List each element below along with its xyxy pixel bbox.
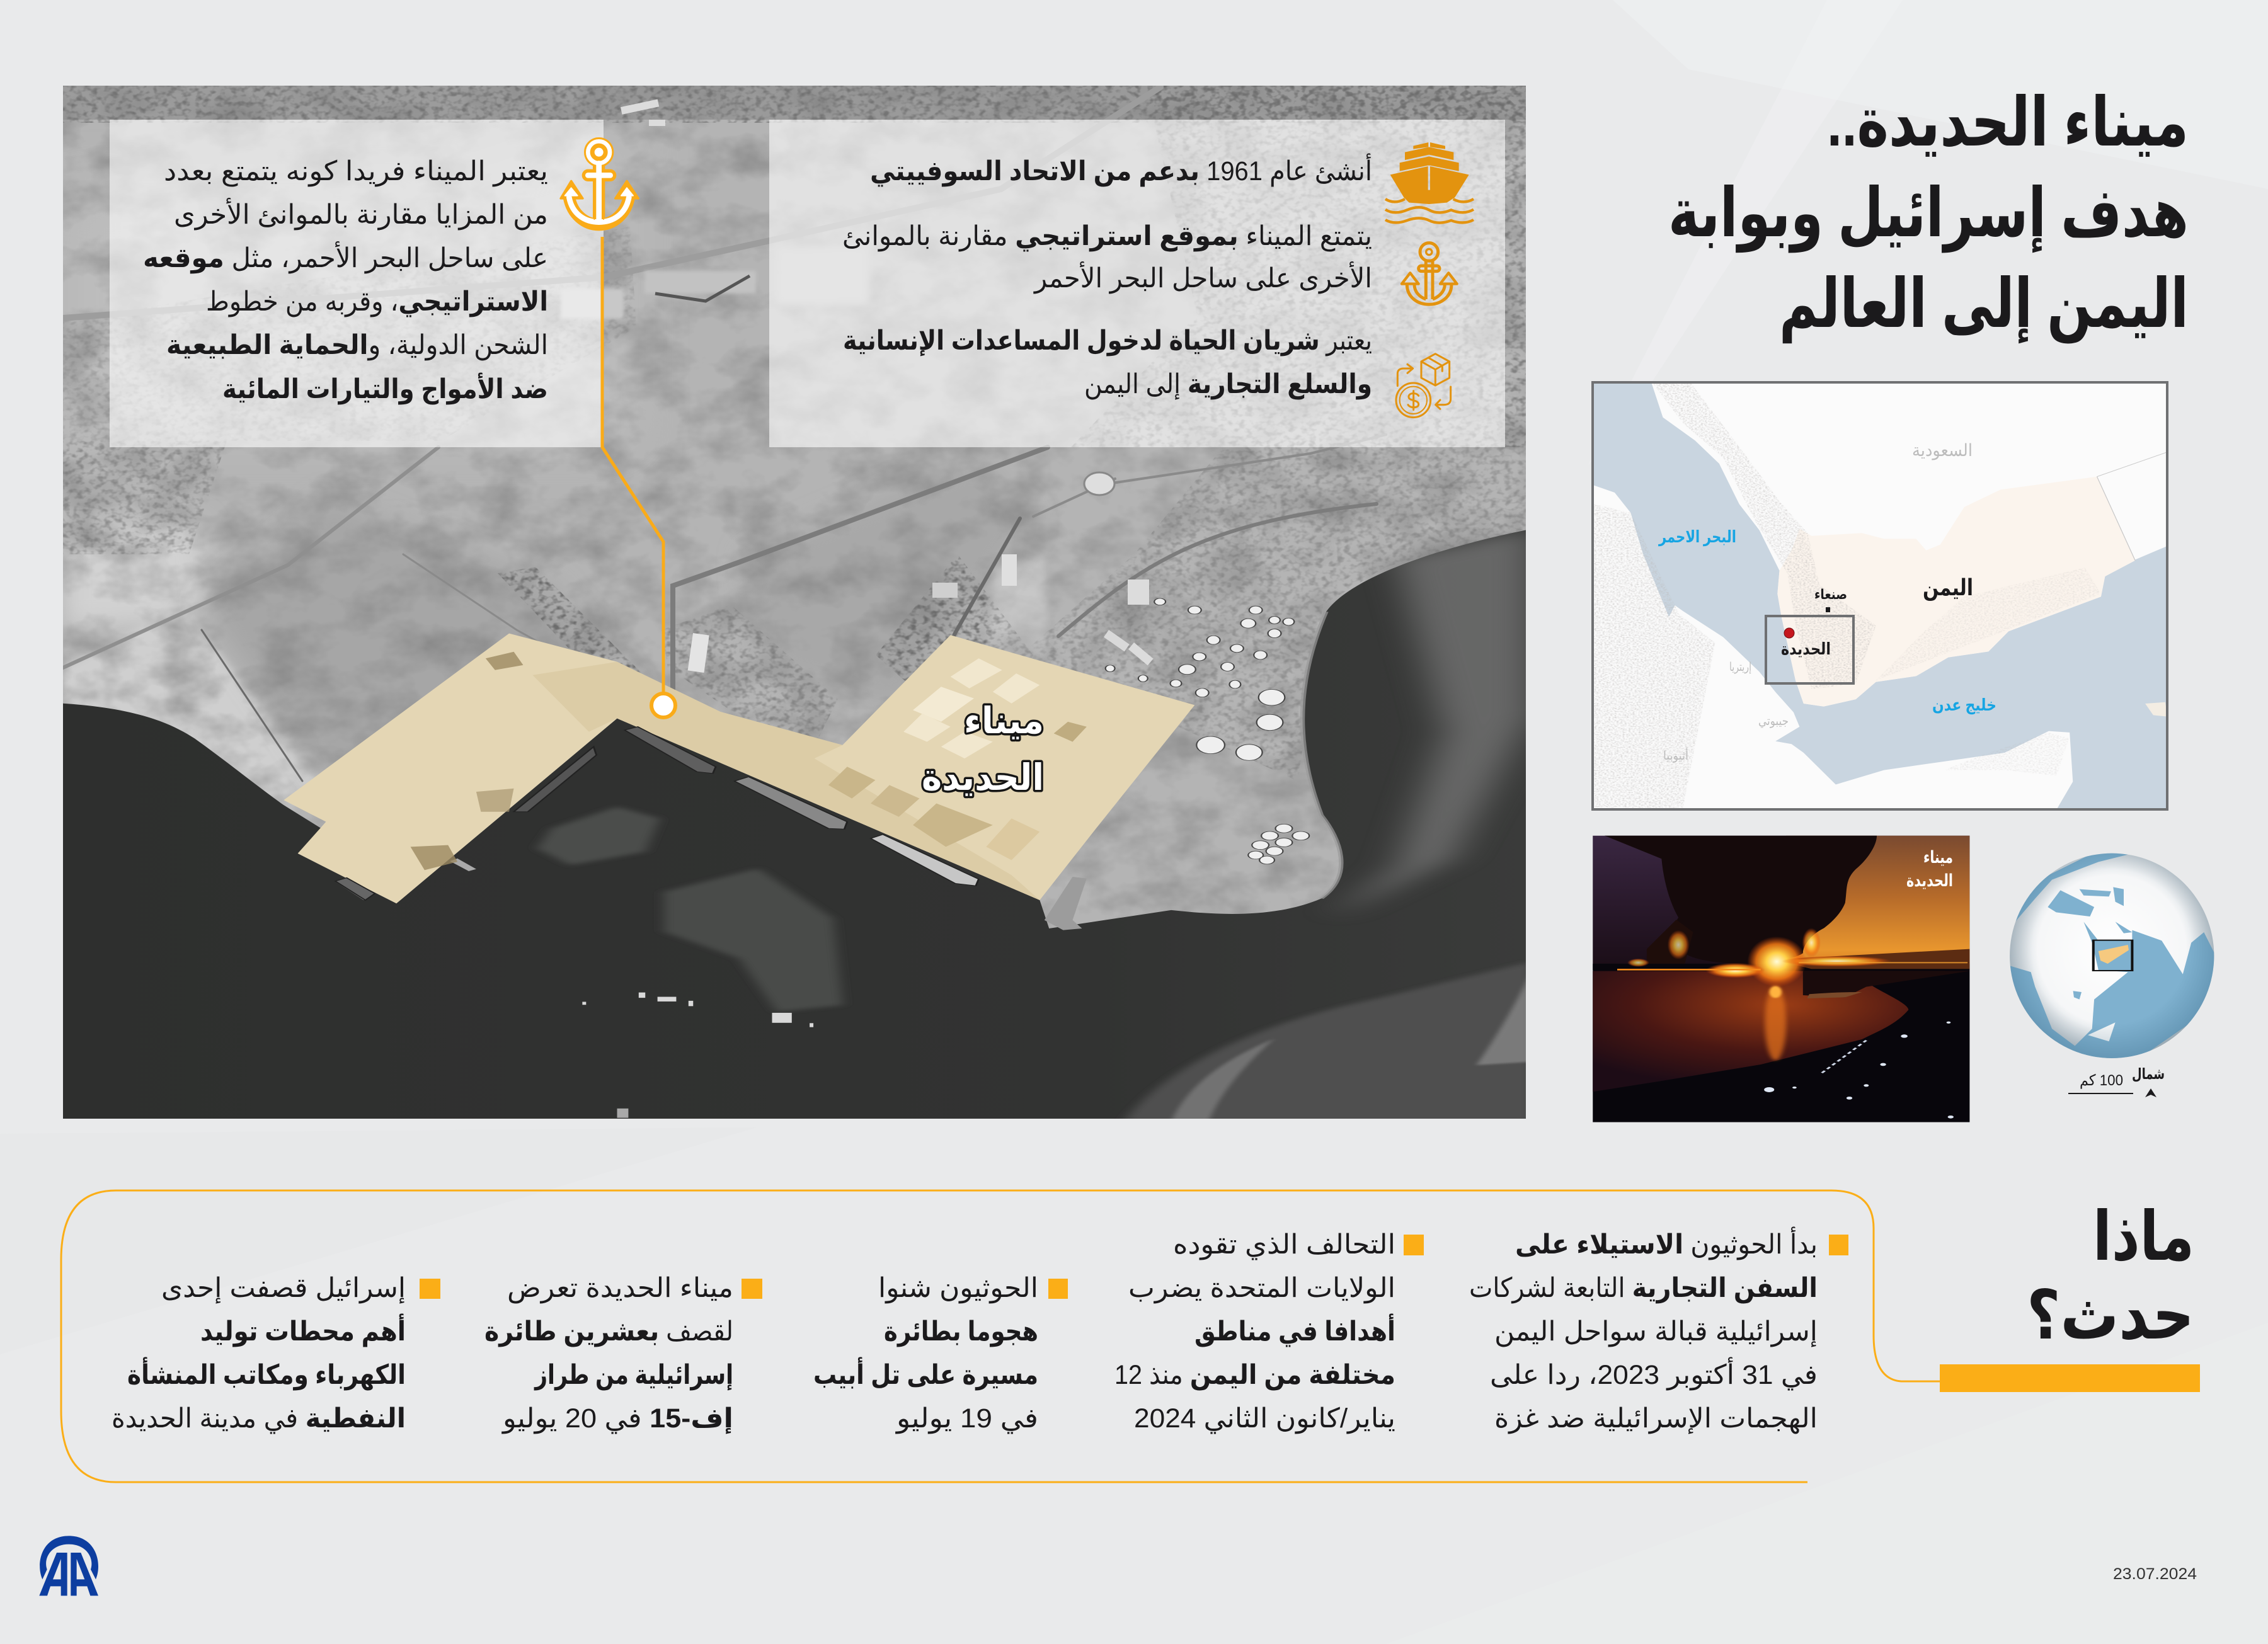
event 2	[1114, 1230, 1424, 1434]
event 4: إف-15 في 20 يوليو	[501, 1403, 733, 1434]
event 1: بدأ الحوثيون الاستيلاء على	[1515, 1226, 1818, 1260]
event 5: الكهرباء ومكاتب المنشأة	[127, 1357, 406, 1391]
map labels: صنعاء	[1814, 586, 1847, 602]
text: port facts: أنشئ عام 1961 بدعم من الاتحاد السوفييتي	[870, 153, 1372, 187]
text: port advantages: يعتبر الميناء فريدا كونه يتمتع بعدد	[164, 156, 548, 187]
heading: what happened: ماذا	[2093, 1198, 2194, 1274]
date: 23.07.2024	[2113, 1565, 2197, 1583]
event 4: ميناء الحديدة تعرض	[507, 1273, 733, 1304]
locator box	[2093, 940, 2132, 971]
map labels	[1658, 441, 1996, 763]
text: port advantages: من المزايا مقارنة بالموانئ الأخرى	[174, 197, 548, 231]
text: port facts: يتمتع الميناء بموقع استراتيجي مقارنة بالموانئ	[842, 221, 1372, 252]
icon: ship	[1385, 142, 1474, 223]
port area highlighted in beige	[284, 634, 1194, 903]
flames	[1617, 928, 1967, 1060]
icon: goods and money	[1396, 354, 1451, 418]
heading: what happened	[2027, 1198, 2194, 1353]
event 3	[813, 1273, 1068, 1434]
event 1: إسرائيلية قبالة سواحل اليمن	[1494, 1316, 1818, 1347]
tank farm east	[1106, 598, 1309, 864]
Hodeidah marker	[1784, 628, 1794, 638]
text: port advantages: على ساحل البحر الأحمر، مثل موقعه	[143, 241, 548, 274]
industrial buildings	[688, 554, 1154, 673]
piers	[335, 859, 1087, 930]
map labels: إريتريا	[1729, 661, 1751, 675]
heading: what happened: حدث؟	[2027, 1277, 2194, 1353]
text: port advantages: الشحن الدولية، والحماية الطبيعية	[166, 330, 548, 361]
Sanaa marker	[1826, 607, 1830, 612]
photo: port fire	[1593, 836, 1969, 1122]
title	[1668, 84, 2189, 344]
map labels: السعودية	[1912, 441, 1973, 460]
text: port advantages	[143, 156, 548, 405]
map labels: اليمن	[1923, 574, 1973, 601]
connector line to port	[602, 237, 675, 717]
event 1	[1469, 1226, 1848, 1434]
sea	[1594, 383, 2167, 809]
label: port name: ميناء	[964, 700, 1044, 741]
info panel: left	[110, 120, 604, 447]
event 4	[484, 1273, 762, 1434]
roundabout	[1084, 472, 1114, 495]
north arrow and scale: 100 كم	[2080, 1072, 2123, 1089]
event 5: إسرائيل قصفت إحدى	[161, 1273, 406, 1304]
terrain	[1594, 383, 2101, 808]
map labels: جيبوتي	[1758, 715, 1789, 728]
event 1: السفن التجارية التابعة لشركات	[1469, 1273, 1818, 1304]
timeline frame	[61, 1190, 1940, 1482]
photo label: الحديدة	[1906, 871, 1953, 890]
label: port name: الحديدة	[922, 757, 1044, 798]
event 1: في 31 أكتوبر 2023، ردا على	[1490, 1357, 1818, 1391]
event 3: في 19 يوليو	[895, 1403, 1038, 1434]
label: port name	[922, 700, 1044, 798]
map labels: أثيوبيا	[1663, 748, 1688, 763]
event 3: الحوثيون شنوا	[878, 1273, 1038, 1304]
refinery tank farm north	[561, 100, 869, 319]
north arrow and scale: شمال	[2132, 1066, 2165, 1083]
event 4: لقصف بعشرين طائرة	[484, 1316, 733, 1347]
land base	[63, 86, 1526, 928]
event 2: مختلفة من اليمن منذ 12	[1114, 1360, 1395, 1391]
text: port facts	[842, 153, 1372, 400]
event 3: مسيرة على تل أبيب	[813, 1357, 1038, 1391]
marker dot	[651, 694, 675, 717]
text: port facts: يعتبر شريان الحياة لدخول المساعدات الإنسانية	[843, 326, 1372, 357]
info panel: right	[769, 120, 1505, 447]
photo label	[1906, 848, 1953, 890]
text: port facts: الأخرى على ساحل البحر الأحمر	[1033, 261, 1372, 294]
satellite image of Hodeidah port	[63, 86, 1531, 1121]
ships at the quay	[335, 727, 978, 900]
event 2: يناير/كانون الثاني 2024	[1134, 1403, 1395, 1434]
north arrow and scale	[2068, 1066, 2165, 1097]
event 5	[112, 1273, 440, 1434]
roads and infrastructure	[63, 87, 1386, 781]
event 2: أهدافا في مناطق	[1194, 1313, 1395, 1347]
sea and coast	[63, 529, 1531, 1121]
icon: large anchor	[561, 141, 638, 225]
photo label: ميناء	[1923, 848, 1953, 867]
inset rectangle	[1766, 616, 1853, 683]
text: port advantages: الاستراتيجي، وقربه من خطوط	[206, 287, 548, 317]
event 3: هجوما بطائرة	[884, 1316, 1038, 1347]
event 5: النفطية في مدينة الحديدة	[112, 1403, 406, 1434]
text: port facts: والسلع التجارية إلى اليمن	[1084, 369, 1372, 400]
icon: anchor	[1402, 243, 1457, 304]
map labels: البحر الاحمر	[1658, 527, 1736, 547]
map labels: الحديدة	[1781, 639, 1831, 658]
text: port advantages: ضد الأمواج والتيارات المائية	[222, 372, 548, 405]
event 2: الولايات المتحدة يضرب	[1128, 1273, 1395, 1304]
map labels: خليج عدن	[1932, 695, 1996, 715]
heading accent bar	[1940, 1364, 2200, 1392]
event 2: التحالف الذي تقوده	[1173, 1230, 1395, 1260]
Yemen highlight	[2099, 945, 2129, 964]
Yemen	[1777, 477, 2135, 707]
shore lights	[1764, 1022, 1954, 1119]
map of Yemen	[1593, 382, 2167, 809]
globe locator	[2010, 852, 2221, 1060]
logo: Anadolu Agency	[39, 1536, 98, 1595]
event 4: إسرائيلية من طراز	[534, 1360, 733, 1391]
event 5: أهم محطات توليد	[200, 1313, 406, 1347]
event 1: الهجمات الإسرائيلية ضد غزة	[1494, 1403, 1818, 1434]
